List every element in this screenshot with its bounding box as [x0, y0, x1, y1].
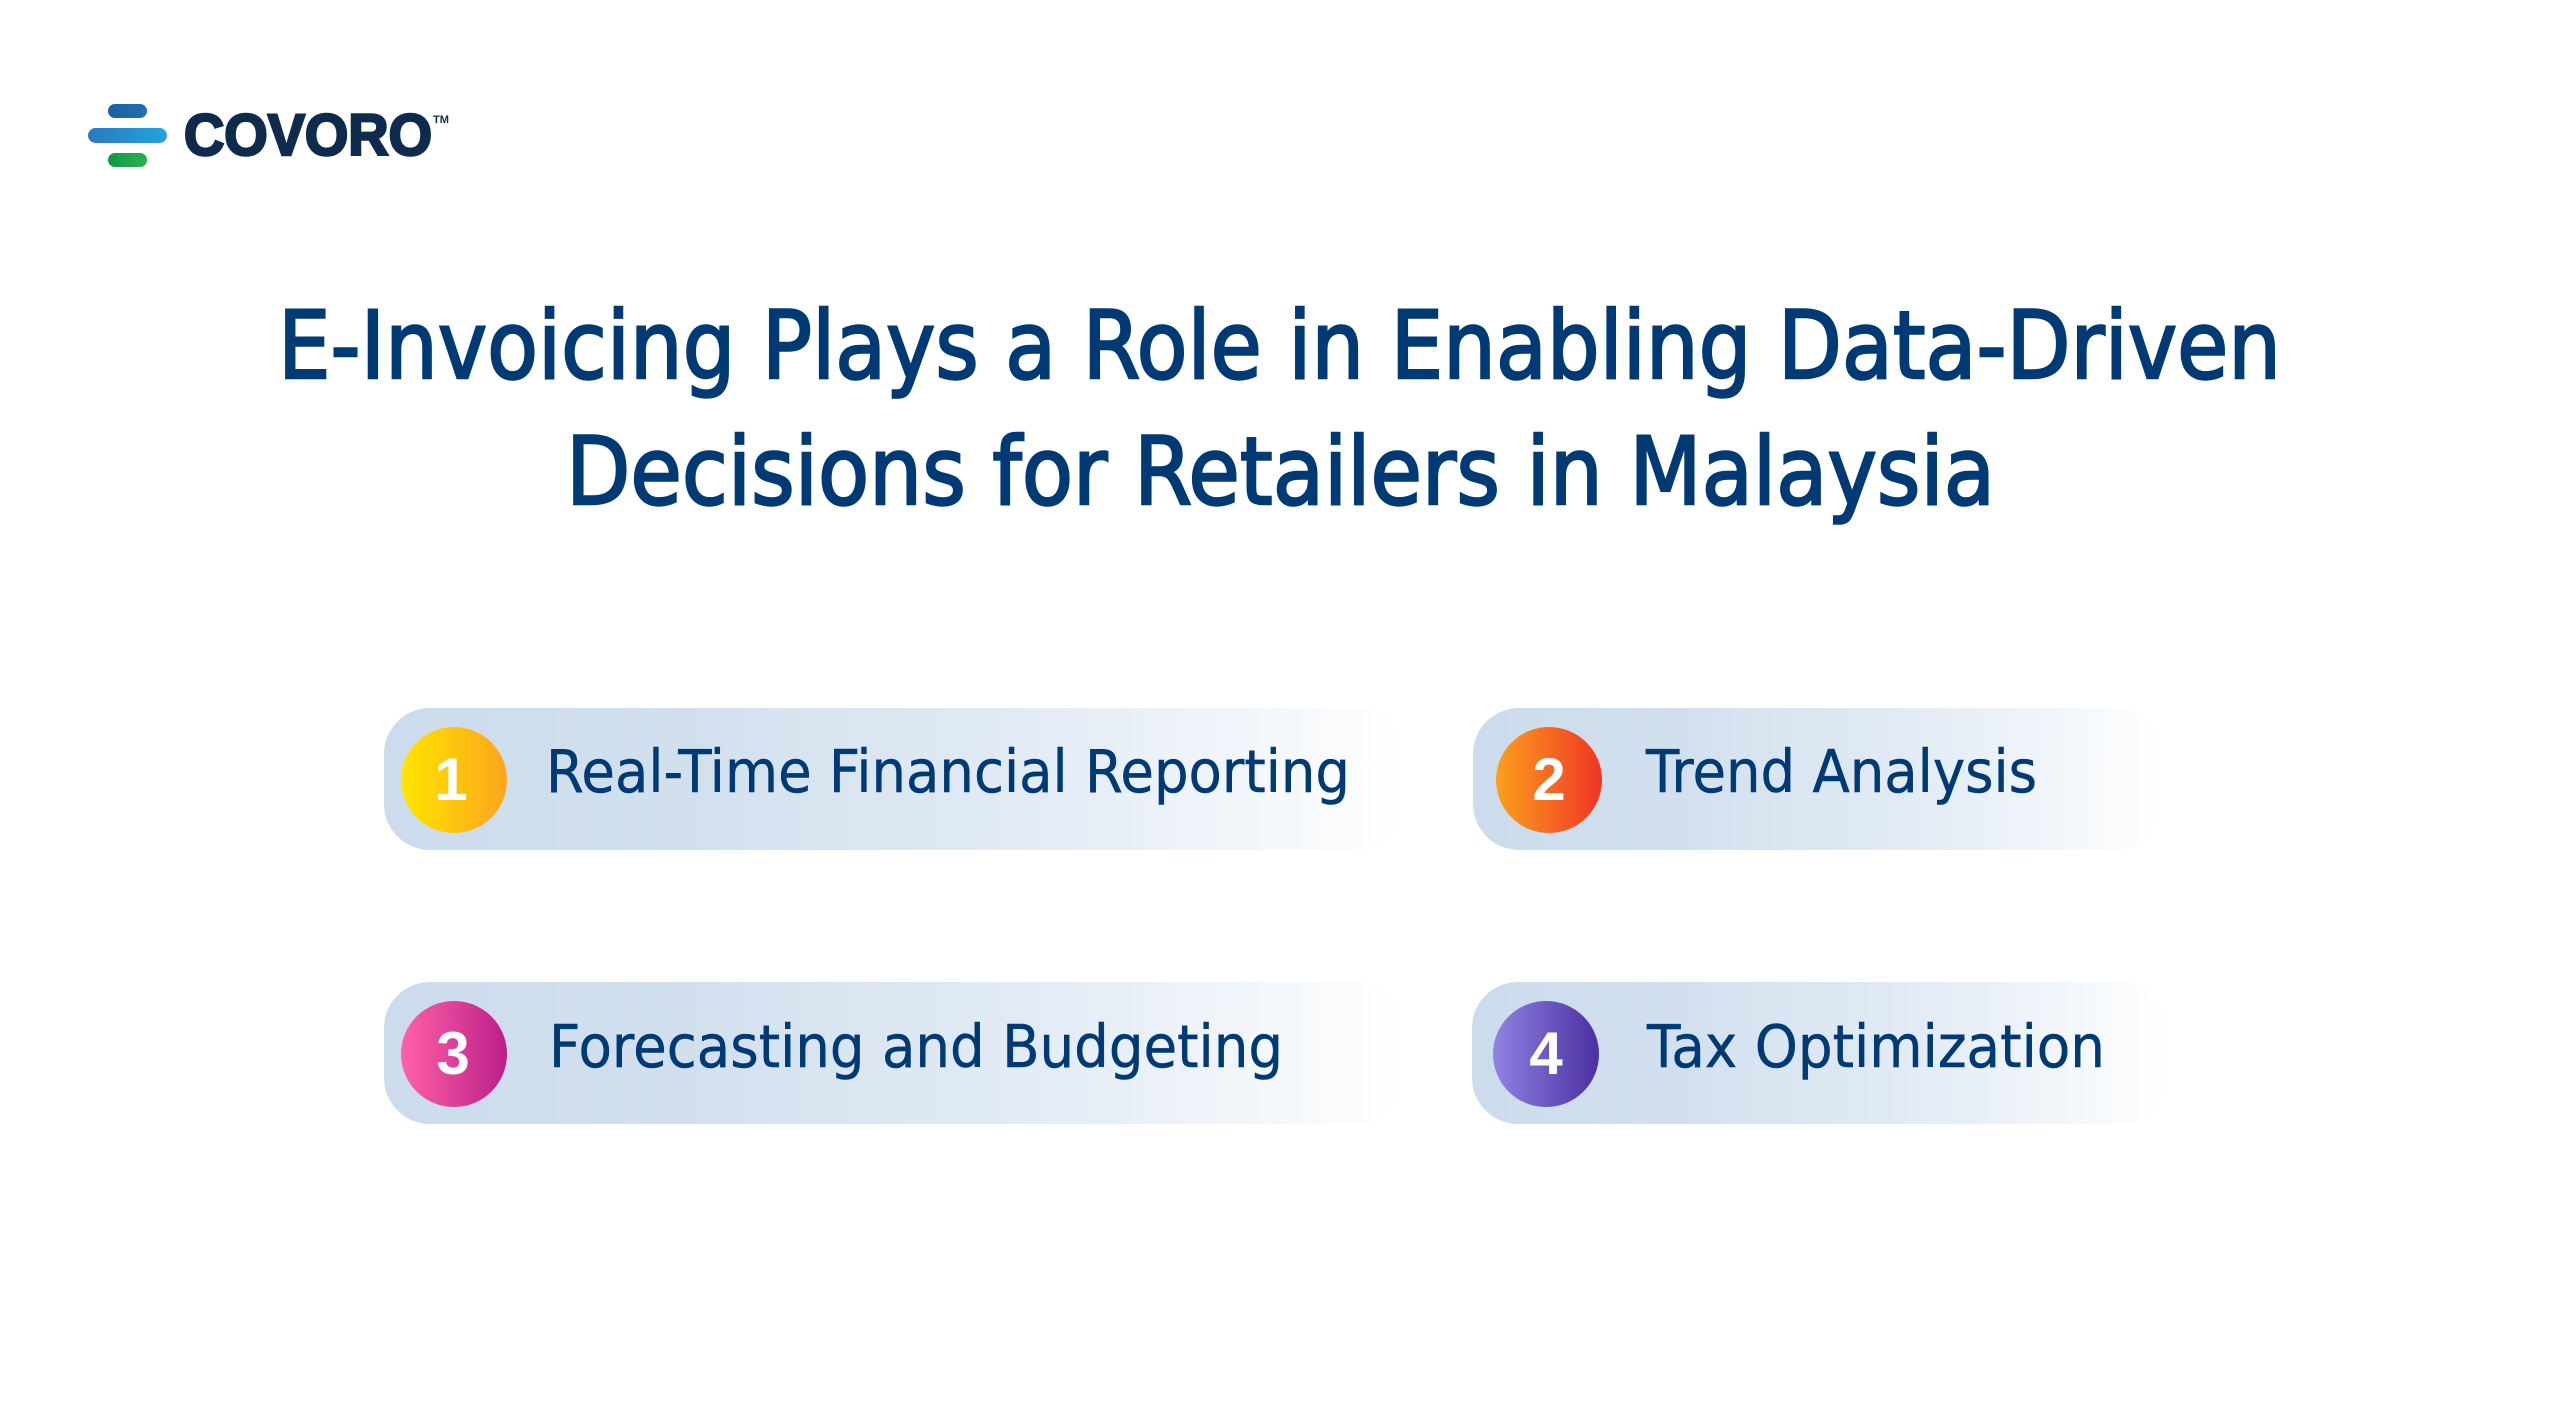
badge 2: [1496, 727, 1602, 833]
logo wordmark: COVORO: [184, 103, 432, 168]
badge 2: 2: [1532, 746, 1566, 813]
badge 4: 4: [1529, 1020, 1563, 1087]
title: Decisions for Retailers in Malaysia: [566, 418, 1995, 527]
badge 1: [401, 727, 507, 833]
label 1: Real-Time Financial Reporting: [546, 737, 1350, 806]
badge 1: 1: [434, 746, 468, 813]
title: [278, 292, 2281, 527]
item 2: Trend Analysis: [1473, 708, 2162, 850]
label 3: Forecasting and Budgeting: [549, 1012, 1283, 1081]
label 4: Tax Optimization: [1646, 1012, 2105, 1081]
badge 3: [401, 1001, 507, 1107]
title: E-Invoicing Plays a Role in Enabling Data-Driven: [278, 292, 2281, 401]
label 2: Trend Analysis: [1645, 737, 2037, 806]
trademark: TM: [433, 114, 449, 126]
badge 4: [1493, 1001, 1599, 1107]
badge 3: 3: [436, 1020, 470, 1087]
item 3: Forecasting and Budgeting: [384, 982, 1404, 1124]
icon: logo bars: [88, 104, 167, 167]
item 1: Real-Time Financial Reporting: [384, 708, 1404, 850]
item 4: Tax Optimization: [1472, 982, 2167, 1124]
logo: Covoro: [88, 103, 449, 168]
